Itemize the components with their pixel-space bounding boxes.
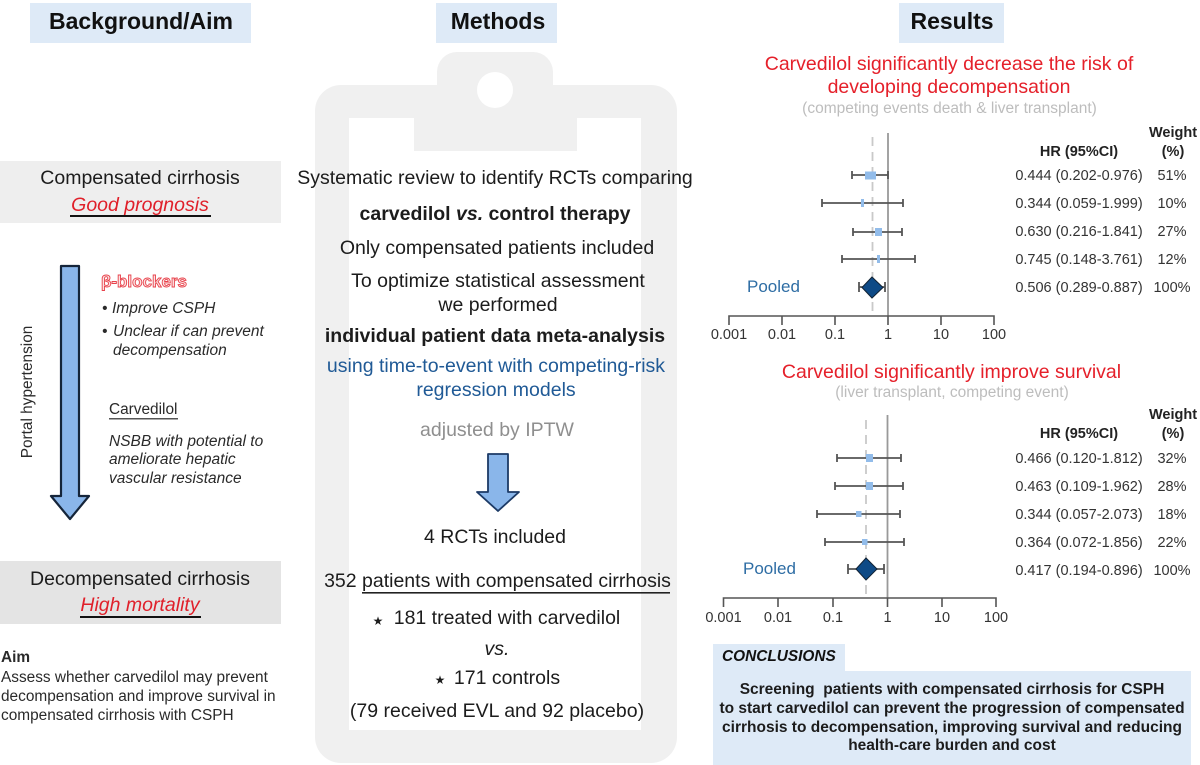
text block: beta-blockers: Improve CSPH (112, 300, 216, 317)
text block: methods review: individual patient data meta-analysis (325, 325, 665, 347)
heading: Methods: Methods (451, 8, 545, 34)
table: survival hazard ratios: 0.466 (0.120-1.812) (1015, 451, 1143, 467)
text block: included patients: 4 RCTs included (424, 526, 566, 548)
icon: clipboard background (315, 52, 677, 763)
text block: included patients (324, 526, 671, 722)
text block: beta-blockers: decompensation (113, 342, 227, 359)
text block: beta-blockers: • (102, 300, 107, 317)
table: decompensation hazard ratios: 0.630 (0.216-1.841) (1015, 224, 1143, 240)
panel: decompensated cirrhosis (0, 561, 281, 624)
panel: conclusions: to start carvedilol can prevent the progression of compensated (719, 700, 1185, 717)
panel: conclusions: cirrhosis to decompensation, improving survival and reducing (722, 719, 1182, 736)
heading: decompensation result: (competing events death & liver transplant) (802, 100, 1097, 117)
text block: aim: decompensation and improve survival in (1, 688, 276, 705)
chart: forest plot decompensation: 0.1 (825, 327, 845, 343)
panel: conclusions: CONCLUSIONS (722, 648, 836, 665)
text block: methods review: Only compensated patients included (340, 237, 654, 259)
table: decompensation hazard ratios: HR (95%CI) (1040, 144, 1118, 160)
heading: Background/Aim: Background/Aim (49, 8, 233, 34)
text block: carvedilol: NSBB with potential to (109, 433, 264, 450)
heading: survival result: Carvedilol significantly improve survival (782, 361, 1121, 383)
table: survival hazard ratios: 0.344 (0.057-2.073) (1015, 507, 1143, 523)
text block: methods review (297, 167, 693, 441)
chart: forest plot decompensation: 0.001 (711, 327, 747, 343)
text block: methods review: Systematic review to identify RCTs comparing (297, 167, 693, 189)
text block: beta-blockers (101, 272, 264, 359)
table: survival hazard ratios: 18% (1157, 507, 1187, 523)
table: survival hazard ratios: 100% (1153, 563, 1191, 579)
chart: forest plot decompensation: 100 (982, 327, 1006, 343)
heading: Results (899, 3, 1004, 43)
text block: methods review: regression models (416, 379, 576, 401)
table: decompensation hazard ratios: 0.506 (0.289-0.887) (1015, 280, 1143, 296)
text block: carvedilol: Carvedilol (109, 401, 177, 418)
text block: methods review: we performed (437, 294, 558, 316)
chart: forest plot decompensation (711, 133, 1006, 343)
arrow: portal hypertension progression (51, 266, 89, 519)
table: survival hazard ratios: Weight (1149, 407, 1197, 423)
heading: survival result: (liver transplant, competing event) (835, 384, 1069, 401)
table: survival hazard ratios: (%) (1162, 426, 1184, 442)
table: survival hazard ratios: 0.417 (0.194-0.896) (1015, 563, 1143, 579)
chart: forest plot decompensation: 0.01 (768, 327, 796, 343)
heading: Methods (436, 3, 557, 43)
panel: conclusions (713, 644, 1191, 765)
text block: included patients: 181 treated with carvedilol (394, 607, 620, 629)
table: decompensation hazard ratios: 10% (1157, 196, 1187, 212)
chart: forest plot survival: 1 (883, 610, 892, 626)
table: decompensation hazard ratios: 0.745 (0.148-3.761) (1015, 252, 1143, 268)
panel: compensated cirrhosis (0, 161, 281, 223)
chart: forest plot survival: 0.1 (823, 610, 843, 626)
table: decompensation hazard ratios: 100% (1153, 280, 1191, 296)
table: decompensation hazard ratios: 27% (1157, 224, 1187, 240)
text block: included patients: vs. (485, 638, 509, 660)
panel: decompensated cirrhosis: High mortality (80, 594, 201, 616)
chart: forest plot survival: 0.01 (764, 610, 792, 626)
table: survival hazard ratios: 22% (1157, 535, 1187, 551)
panel: decompensated cirrhosis: Decompensated cirrhosis (30, 568, 250, 590)
table: decompensation hazard ratios (1015, 125, 1197, 296)
text block: aim (1, 649, 276, 724)
panel: conclusions: Screening patients with compensated cirrhosis for CSPH (740, 681, 1164, 698)
text block: methods review: adjusted by IPTW (420, 419, 575, 441)
heading: decompensation result: developing decompensation (828, 76, 1070, 98)
panel: compensated cirrhosis: Compensated cirrhosis (40, 167, 240, 189)
text block: aim: Assess whether carvedilol may prevent (1, 669, 269, 686)
table: survival hazard ratios: HR (95%CI) (1040, 426, 1118, 442)
table: decompensation hazard ratios: Weight (1149, 125, 1197, 141)
text block: included patients: ★ (373, 614, 383, 628)
text block: beta-blockers: • (102, 323, 107, 340)
label: portal hypertension: Portal hypertension (19, 326, 36, 458)
text block: methods review: carvedilol vs. control therapy (360, 203, 631, 225)
chart: forest plot survival: 100 (984, 610, 1008, 626)
text block: aim: compensated cirrhosis with CSPH (1, 707, 234, 724)
heading: Results: Results (910, 8, 994, 34)
panel: conclusions: health-care burden and cost (848, 737, 1056, 754)
table: survival hazard ratios (1015, 407, 1197, 579)
text block: included patients: ★ (435, 673, 445, 687)
arrow: methods down (477, 454, 519, 511)
chart: forest plot survival: 0.001 (705, 610, 742, 626)
table: decompensation hazard ratios: 51% (1157, 168, 1187, 184)
heading: Background/Aim (30, 3, 251, 43)
heading: survival result (782, 361, 1121, 401)
chart: forest plot survival: 10 (934, 610, 950, 626)
table: decompensation hazard ratios: (%) (1162, 144, 1184, 160)
text block: carvedilol: vascular resistance (109, 470, 242, 487)
table: survival hazard ratios: 32% (1157, 451, 1187, 467)
text block: methods review: using time-to-event with competing-risk (327, 355, 665, 377)
text block: methods review: To optimize statistical assessment (351, 270, 645, 292)
chart: forest plot decompensation: 1 (884, 327, 892, 343)
heading: decompensation result (765, 53, 1134, 117)
panel: compensated cirrhosis: Good prognosis (71, 194, 209, 216)
table: decompensation hazard ratios: 0.444 (0.202-0.976) (1015, 168, 1143, 184)
text block: carvedilol (109, 401, 264, 487)
text block: beta-blockers: β-blockers (101, 272, 187, 291)
chart: forest plot decompensation: 10 (933, 327, 949, 343)
table: decompensation hazard ratios: 12% (1157, 252, 1187, 268)
table: decompensation hazard ratios: 0.344 (0.059-1.999) (1015, 196, 1143, 212)
chart: forest plot survival: Pooled (743, 559, 796, 578)
table: survival hazard ratios: 28% (1157, 479, 1187, 495)
text block: included patients: (79 received EVL and 92 placebo) (350, 700, 644, 722)
text block: included patients: 171 controls (454, 667, 560, 689)
chart: forest plot survival (705, 415, 1008, 626)
table: survival hazard ratios: 0.463 (0.109-1.962) (1015, 479, 1143, 495)
table: survival hazard ratios: 0.364 (0.072-1.856) (1015, 535, 1143, 551)
text block: beta-blockers: Unclear if can prevent (113, 323, 264, 340)
heading: decompensation result: Carvedilol significantly decrease the risk of (765, 53, 1134, 75)
text block: carvedilol: ameliorate hepatic (109, 451, 236, 468)
text block: aim: Aim (1, 649, 30, 666)
chart: forest plot decompensation: Pooled (747, 277, 800, 296)
text block: included patients: 352 patients with compensated cirrhosis (324, 570, 671, 592)
